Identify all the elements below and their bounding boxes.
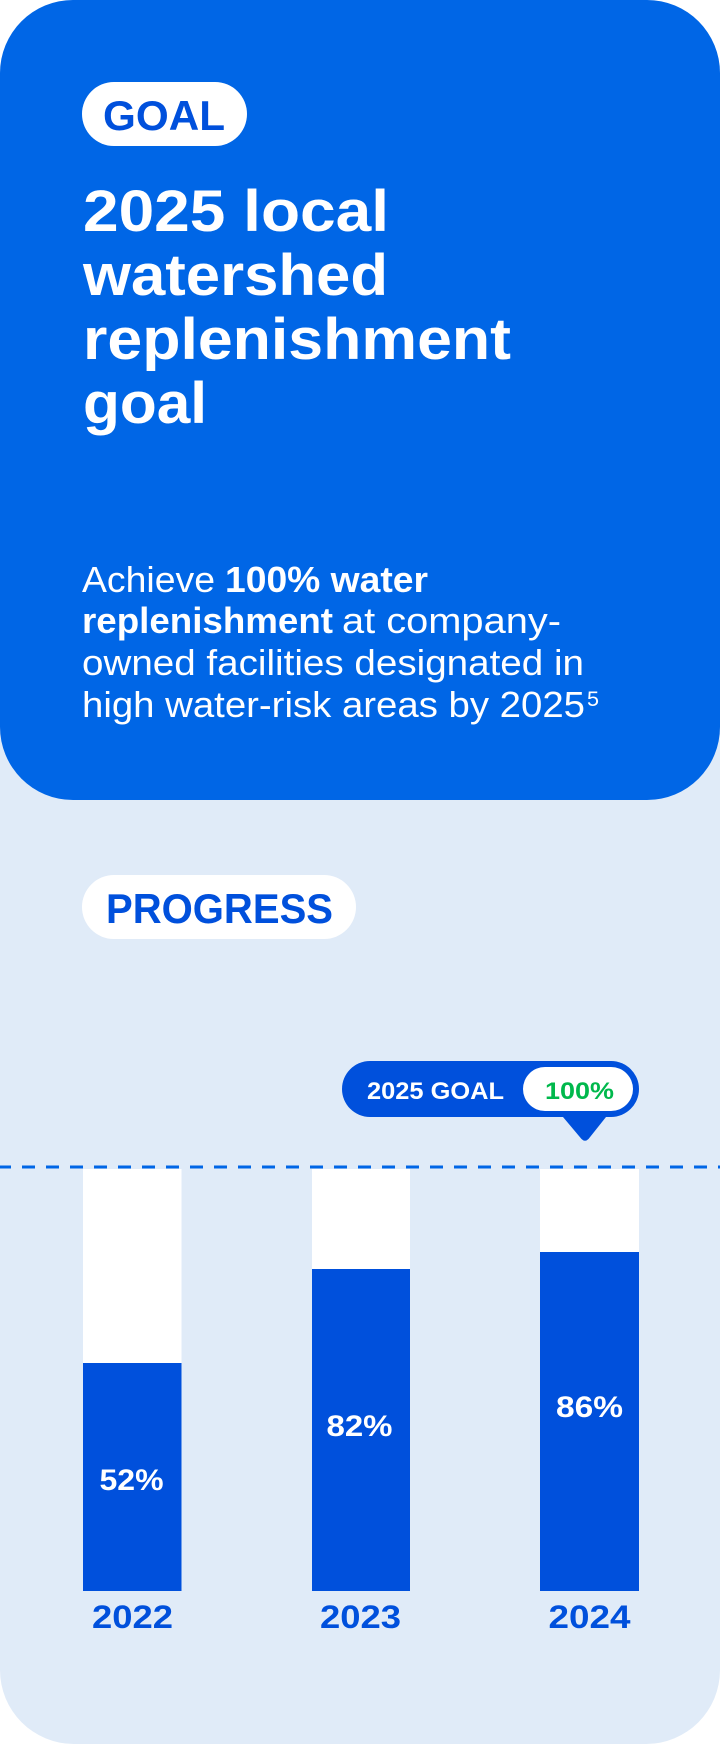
year axis labels: 2024 [548,1599,631,1635]
goal description text: Achieve [82,559,215,600]
goal description text [82,559,599,725]
year axis labels [92,1599,631,1635]
bar: 2024 86% [540,1169,639,1591]
panel: goal card [0,0,720,800]
title [82,179,511,436]
title: goal [83,371,207,436]
goal label pill [82,82,247,146]
goal label pill: GOAL [103,92,225,139]
goal description text: 100% water [225,559,428,600]
goal description text: high water-risk areas by 2025 [82,684,585,725]
progress label pill [82,875,356,939]
title: watershed [82,243,388,308]
title: replenishment [83,307,511,372]
bar: 2023 82% [312,1169,410,1591]
progress label pill: PROGRESS [106,885,333,932]
bar: 2022 52%: 52% [100,1464,164,1497]
callout: 2025 goal 100% [342,1061,639,1141]
bar: 2022 52% [83,1169,182,1591]
year axis labels: 2022 [92,1599,173,1635]
goal description text: owned facilities designated in [82,642,584,683]
bar: 2023 82%: 82% [326,1410,392,1443]
bar: 2024 86%: 86% [556,1391,623,1424]
callout: 2025 goal 100%: 2025 GOAL [367,1078,504,1105]
goal description text: at company- [342,600,561,641]
bar chart [83,1169,639,1635]
goal description text: replenishment [82,600,333,641]
callout: 2025 goal 100%: 100% [545,1078,614,1105]
goal description text: 5 [587,688,599,711]
year axis labels: 2023 [320,1599,401,1635]
title: 2025 local [83,179,389,244]
